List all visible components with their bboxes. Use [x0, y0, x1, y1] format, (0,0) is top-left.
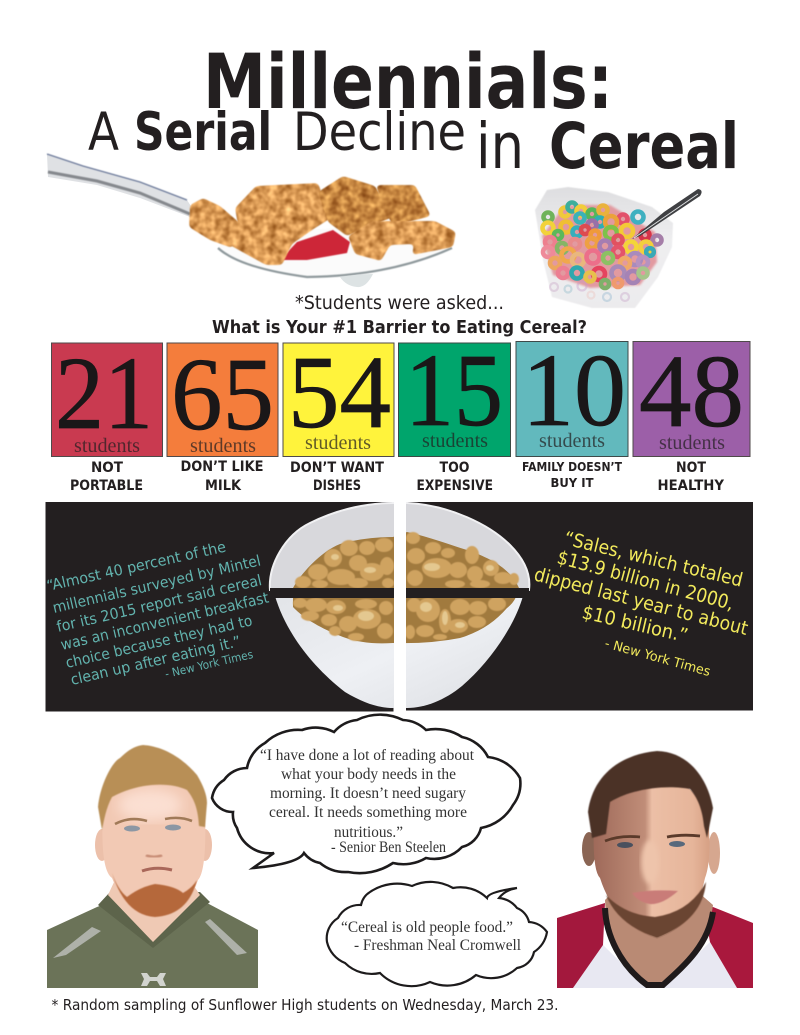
stat: 65 don't like milk: DON’T LIKE — [180, 459, 264, 475]
right quote in yellow: “Sales, which totaled — [562, 527, 745, 592]
stat: 15 too expensive: EXPENSIVE — [416, 478, 493, 494]
left quote in teal: for its 2015 report said cereal — [55, 571, 264, 636]
stat: 65 don't like milk — [167, 337, 278, 494]
stat: 54 don't want dishes: students — [305, 432, 371, 454]
speech bubble: Ben Steelen quote: morning. It doesn’t need sugary — [270, 785, 466, 802]
stat: 21 not portable: PORTABLE — [70, 478, 143, 494]
image: spoon with cereal flakes — [47, 154, 456, 287]
speech bubble: Ben Steelen quote: cereal. It needs something more — [269, 804, 467, 821]
right quote in yellow: - New York Times — [603, 636, 712, 680]
title: A — [88, 102, 119, 163]
left quote in teal: “Almost 40 percent of the — [45, 538, 228, 595]
left quote in teal: - New York Times — [164, 647, 254, 681]
stat: 48 not healthy — [633, 334, 750, 494]
left quote in teal — [45, 538, 271, 689]
stat: 65 don't like milk: MILK — [205, 478, 242, 494]
title: in — [476, 110, 524, 183]
stat: 10 family doesn't buy it: BUY IT — [550, 475, 594, 490]
stat: 10 family doesn't buy it: students — [539, 430, 605, 452]
stat: 48 not healthy: 48 — [639, 334, 744, 449]
stat: 21 not portable: students — [74, 435, 140, 457]
stat: 54 don't want dishes — [283, 335, 394, 494]
stat: 65 don't like milk: 65 — [171, 337, 274, 452]
stat: 48 not healthy: NOT — [676, 460, 706, 476]
stat: 15 too expensive: TOO — [440, 460, 470, 476]
title: Millennials: — [203, 37, 613, 126]
speech bubble: Ben Steelen quote: “I have done a lot of reading about — [260, 747, 475, 764]
stat: 15 too expensive: 15 — [405, 333, 503, 448]
footnote: * Random sampling of Sunflower High students on Wednesday, March 23. — [52, 996, 558, 1014]
right quote in yellow — [532, 527, 750, 680]
left quote in teal: clean up after eating it.” — [69, 632, 242, 689]
stat: 54 don't want dishes: 54 — [288, 335, 391, 450]
stat: 15 too expensive — [398, 333, 510, 494]
speech bubble: Neal Cromwell quote: “Cereal is old people food.” — [341, 919, 513, 936]
speech bubble: Neal Cromwell quote — [327, 882, 547, 986]
speech bubble: Ben Steelen quote: what your body needs in the — [281, 766, 456, 783]
stat: 48 not healthy: HEALTHY — [658, 478, 725, 494]
stat: 21 not portable: 21 — [55, 336, 153, 451]
stat: 65 don't like milk: students — [190, 435, 256, 457]
survey intro text: What is Your #1 Barrier to Eating Cereal? — [212, 317, 587, 338]
stat: 10 family doesn't buy it — [516, 333, 628, 490]
speech bubble: Neal Cromwell quote: - Freshman Neal Cromwell — [354, 937, 521, 954]
survey intro text — [212, 292, 587, 338]
right quote in yellow: dipped last year to about — [532, 564, 750, 640]
stat: 54 don't want dishes: DISHES — [313, 478, 361, 494]
photo: freshman student in baseball tee — [557, 751, 753, 988]
survey intro text: *Students were asked... — [295, 292, 504, 314]
title: Cereal — [549, 110, 739, 183]
left quote in teal: choice because they had to — [64, 611, 254, 672]
speech bubble: Ben Steelen quote: nutritious.” — [334, 824, 403, 841]
stat: 54 don't want dishes: DON’T WANT — [290, 460, 384, 476]
stat: 15 too expensive: students — [422, 430, 488, 452]
stat: 48 not healthy: students — [659, 432, 725, 454]
stat: 21 not portable — [52, 336, 162, 494]
panel: black quote band with split bowl — [45, 500, 753, 714]
left quote in teal: millennials surveyed by Mintel — [51, 551, 262, 617]
right quote in yellow: $13.9 billion in 2000, — [555, 547, 736, 615]
title — [88, 37, 739, 183]
speech bubble: Ben Steelen quote — [212, 715, 520, 873]
stat: 10 family doesn't buy it: FAMILY DOESN’T — [522, 459, 622, 474]
stat: 10 family doesn't buy it: 10 — [522, 333, 626, 448]
photo: senior student in green shirt — [47, 745, 258, 988]
stat: 21 not portable: NOT — [91, 460, 123, 476]
right quote in yellow: $10 billion.” — [580, 601, 690, 647]
left quote in teal: was an inconvenient breakfast — [59, 588, 271, 654]
title: Decline — [293, 102, 466, 163]
speech bubble: Ben Steelen quote: - Senior Ben Steelen — [331, 839, 446, 856]
title: Serial — [134, 102, 272, 163]
image: bowl of fruit loops — [535, 187, 702, 308]
image: split cereal bowl — [270, 503, 529, 708]
